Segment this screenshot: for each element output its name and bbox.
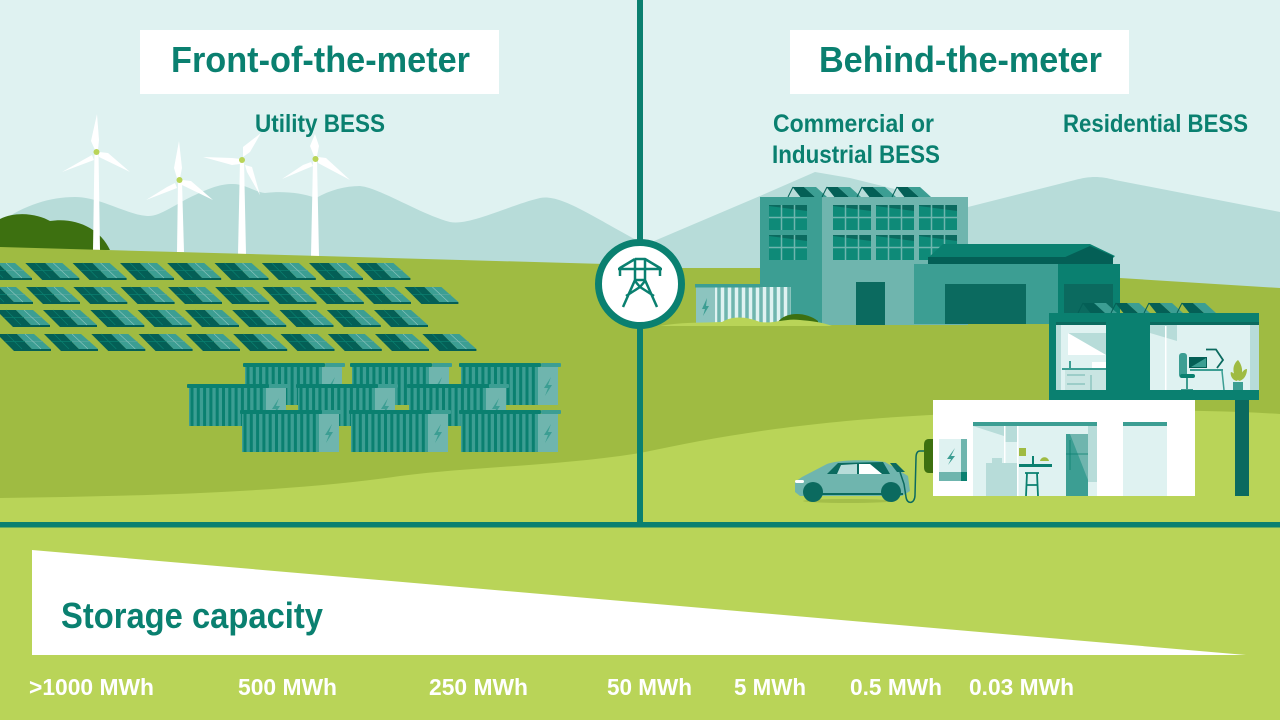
grid icon: pylon in circle [598, 242, 682, 326]
capacity scale labels: 0.5 MWh [850, 674, 942, 700]
capacity scale labels: 5 MWh [734, 674, 806, 700]
right mid-green ground [640, 268, 1280, 520]
commercial building [760, 187, 968, 325]
horizontal rule [0, 522, 1280, 528]
capacity scale labels: 50 MWh [607, 674, 692, 700]
label: utility BESS: Utility BESS [255, 110, 385, 138]
capacity scale labels: >1000 MWh [29, 674, 154, 700]
left mid-green ground [0, 247, 640, 520]
solar field [0, 263, 476, 351]
warehouse [914, 244, 1120, 324]
house pillar [1235, 400, 1249, 496]
office window [1150, 322, 1259, 390]
wall charger [924, 439, 933, 473]
heading: front-of-the-meter: Front-of-the-meter [171, 39, 470, 80]
capacity scale labels [29, 674, 1074, 700]
wedge heading: Storage capacity [61, 595, 323, 636]
potted plant [1231, 360, 1247, 390]
kitchen window [1056, 322, 1106, 390]
small battery container [695, 284, 791, 324]
right mountains [640, 172, 1280, 300]
centre divider [637, 0, 643, 522]
label: commercial or industrial BESS: Commercial or [773, 110, 934, 138]
battery containers [187, 363, 561, 452]
residential upper storey [1049, 303, 1259, 400]
office chair and desk [1179, 350, 1223, 390]
base panel [0, 522, 1280, 720]
label: commercial or industrial BESS: Industrial BESS [772, 141, 940, 169]
foreground light-green hill [0, 410, 1280, 522]
left bush [0, 214, 110, 250]
shrubs [660, 314, 832, 326]
label: residential BESS: Residential BESS [1063, 110, 1248, 138]
storage capacity wedge [32, 550, 1246, 655]
heading: behind-the-meter: Behind-the-meter [819, 39, 1102, 80]
capacity scale labels: 500 MWh [238, 674, 337, 700]
capacity scale labels: 250 MWh [429, 674, 528, 700]
label: commercial or industrial BESS [772, 110, 940, 169]
residential ground floor [933, 400, 1195, 496]
heading: front-of-the-meter [140, 30, 499, 94]
electric car [795, 451, 924, 503]
capacity scale labels: 0.03 MWh [969, 674, 1074, 700]
heading: behind-the-meter [790, 30, 1129, 94]
home battery [939, 439, 967, 481]
left mountains [0, 184, 640, 270]
wind turbines [62, 114, 350, 256]
